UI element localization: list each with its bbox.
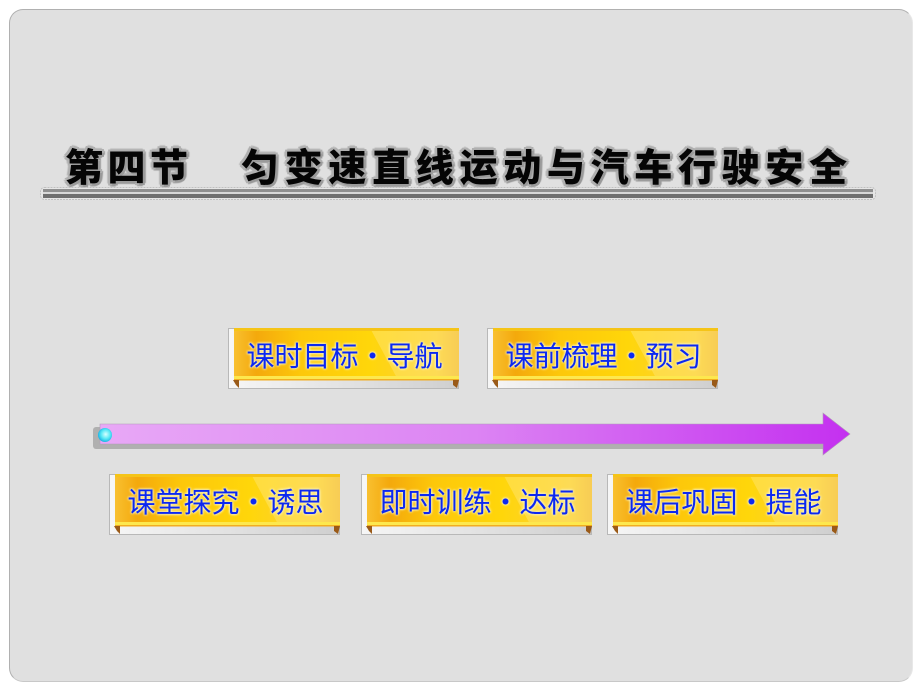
button: 课后巩固·提能	[607, 474, 838, 535]
button: 课前梳理·预习	[487, 328, 718, 389]
timeline arrow	[93, 412, 850, 456]
button: 课前梳理·预习: 课前梳理・预习	[505, 341, 702, 372]
button: 课后巩固·提能: 课后巩固・提能	[625, 487, 822, 518]
title underline	[40, 187, 876, 200]
button: 课时目标·导航: 课时目标・导航	[246, 341, 442, 372]
button: 课堂探究·诱思	[109, 474, 340, 535]
title	[63, 144, 853, 190]
button: 即时训练·达标	[361, 474, 592, 535]
section number: 第四节	[65, 148, 193, 190]
section heading: 匀变速直线运动与汽车行驶安全	[241, 148, 853, 190]
button: 课时目标·导航	[228, 328, 459, 389]
button: 即时训练·达标: 即时训练・达标	[379, 487, 576, 518]
button: 课堂探究·诱思: 课堂探究・诱思	[127, 487, 324, 518]
